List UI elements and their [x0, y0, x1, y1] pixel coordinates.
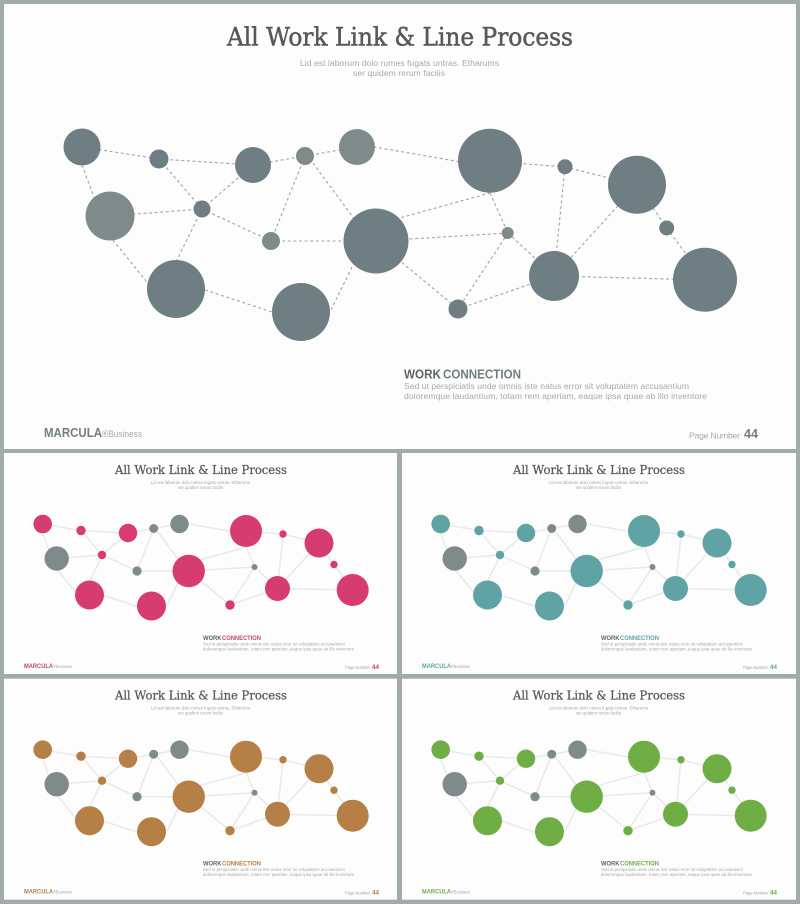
text block: work connection: doloremque laudantium, totam rem aperiam, eaque ipsa quae ab illo inventore	[601, 646, 753, 652]
title: All Work Link & Line Process	[512, 688, 685, 703]
subtitle: ser quidem rerum facilis	[178, 485, 223, 490]
text block: work connection	[203, 635, 355, 652]
network connection lines	[440, 748, 751, 832]
network nodes	[431, 740, 767, 846]
subtitle	[549, 706, 648, 716]
panel: pink slide	[4, 453, 397, 674]
text block: work connection: Sed ut perspiciatis unde omnis iste natus error sit voluptatem accusantium	[601, 867, 743, 872]
brand: ®Business	[53, 663, 73, 669]
page number: 44	[770, 664, 777, 671]
brand	[24, 889, 73, 896]
brand: ®Business	[102, 429, 142, 439]
brand	[24, 663, 73, 670]
network nodes	[431, 515, 767, 620]
page number	[345, 890, 379, 897]
text block: work connection: CONNECTION	[222, 635, 261, 642]
panel: green slide	[402, 679, 796, 900]
page number	[345, 664, 379, 671]
network nodes	[33, 740, 369, 846]
brand: MARCULA	[422, 889, 451, 896]
text block: work connection: Sed ut perspiciatis unde omnis iste natus error sit voluptatem accusantium	[404, 381, 689, 391]
page number: Page Number	[743, 665, 769, 670]
text block: work connection: WORK	[203, 861, 222, 868]
network nodes	[33, 515, 369, 620]
page number: 44	[372, 664, 379, 671]
text block: work connection: CONNECTION	[620, 861, 659, 868]
network connection lines	[82, 144, 705, 312]
text block: work connection: CONNECTION	[222, 861, 261, 868]
text block: work connection: WORK	[601, 635, 620, 642]
brand: MARCULA	[24, 663, 53, 670]
subtitle: ser quidem rerum facilis	[178, 711, 223, 716]
text block: work connection: Sed ut perspiciatis unde omnis iste natus error sit voluptatem accusantium	[203, 867, 345, 872]
page number	[743, 890, 777, 897]
page number	[689, 426, 759, 441]
title: All Work Link & Line Process	[114, 462, 287, 477]
subtitle: ser quidem rerum facilis	[353, 68, 445, 78]
page number: Page Number	[345, 665, 371, 670]
text block: work connection: doloremque laudantium, totam rem aperiam, eaque ipsa quae ab illo inventore	[404, 391, 707, 401]
text block: work connection	[404, 368, 707, 401]
page number	[743, 664, 777, 671]
brand: ®Business	[451, 663, 471, 669]
text block: work connection: Sed ut perspiciatis unde omnis iste natus error sit voluptatem accusantium	[601, 642, 743, 646]
page number: 44	[372, 890, 379, 897]
network connection lines	[42, 522, 353, 606]
subtitle	[549, 480, 648, 490]
title: All Work Link & Line Process	[512, 462, 685, 477]
subtitle: Lid est laborum dolo rumes fugats untras. Etharums	[549, 706, 648, 711]
text block: work connection: doloremque laudantium, totam rem aperiam, eaque ipsa quae ab illo inventore	[203, 872, 355, 877]
brand: MARCULA	[24, 889, 53, 896]
subtitle	[300, 58, 499, 78]
brand	[44, 426, 142, 440]
panel: teal slide	[402, 453, 796, 674]
subtitle: ser quidem rerum facilis	[576, 711, 621, 716]
brand: MARCULA	[422, 663, 451, 670]
text block: work connection: WORK	[203, 635, 222, 642]
text block: work connection: doloremque laudantium, totam rem aperiam, eaque ipsa quae ab illo inventore	[203, 646, 355, 652]
page number: 44	[770, 890, 777, 897]
panel: main grey slide	[4, 4, 796, 449]
text block: work connection: WORK	[601, 861, 620, 868]
title: All Work Link & Line Process	[226, 22, 573, 52]
text block: work connection: CONNECTION	[620, 635, 659, 642]
text block: work connection	[601, 635, 753, 652]
subtitle: Lid est laborum dolo rumes fugats untras. Etharums	[549, 480, 648, 485]
page number: 44	[744, 426, 759, 441]
page number: Page Number	[345, 891, 371, 896]
brand: ®Business	[451, 889, 471, 895]
text block: work connection	[601, 861, 753, 877]
text block: work connection: doloremque laudantium, totam rem aperiam, eaque ipsa quae ab illo inventore	[601, 872, 753, 877]
brand: MARCULA	[44, 426, 102, 440]
text block: work connection: WORK	[404, 368, 441, 382]
subtitle: Lid est laborum dolo rumes fugats untras. Etharums	[300, 58, 499, 68]
subtitle: Lid est laborum dolo rumes fugats untras. Etharums	[151, 706, 250, 711]
title: All Work Link & Line Process	[114, 688, 287, 703]
brand	[422, 889, 471, 896]
text block: work connection: CONNECTION	[443, 368, 521, 382]
network connection lines	[440, 522, 751, 606]
brand	[422, 663, 471, 670]
text block: work connection	[203, 861, 355, 877]
page number: Page Number	[743, 891, 769, 896]
subtitle: Lid est laborum dolo rumes fugats untras. Etharums	[151, 480, 250, 485]
brand: ®Business	[53, 889, 73, 895]
subtitle: ser quidem rerum facilis	[576, 485, 621, 490]
panel: brown slide	[4, 679, 397, 900]
network connection lines	[42, 748, 353, 832]
subtitle	[151, 706, 250, 716]
network nodes	[64, 128, 737, 341]
text block: work connection: Sed ut perspiciatis unde omnis iste natus error sit voluptatem accusantium	[203, 642, 345, 646]
page number: Page Number	[689, 430, 740, 440]
subtitle	[151, 480, 250, 490]
